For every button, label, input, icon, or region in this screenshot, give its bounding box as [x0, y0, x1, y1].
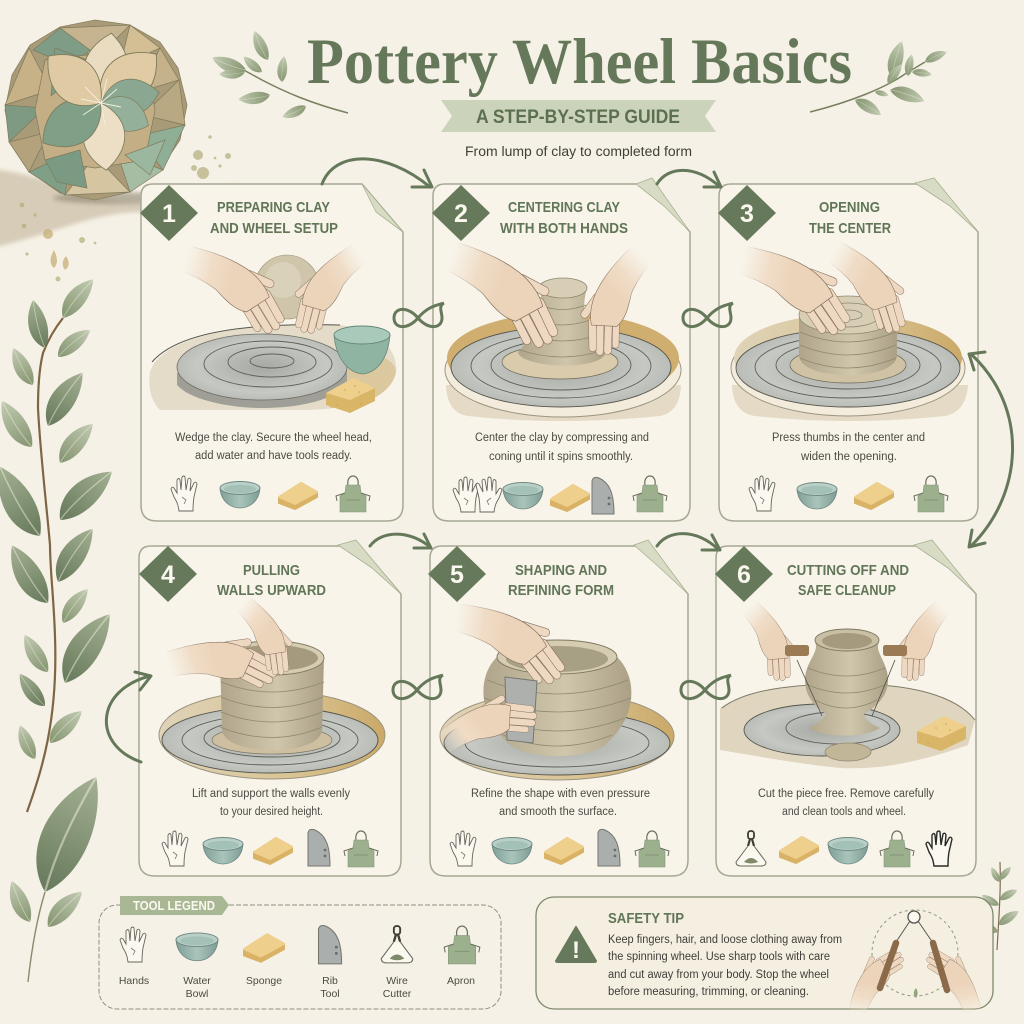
- description: [192, 788, 350, 818]
- link: between steps 1 and 2: [394, 303, 444, 327]
- panel: tool legend: [99, 896, 501, 1009]
- number badge 5: 5: [450, 561, 464, 589]
- number badge 2: [432, 185, 490, 241]
- legend item: rib tool: Tool: [320, 988, 340, 1000]
- arrow: step 3 to 6: [969, 352, 1013, 547]
- decorative sprig: main left branch: [0, 273, 120, 812]
- heading: THE CENTER: [809, 220, 891, 237]
- number badge 4: 4: [161, 561, 175, 589]
- legend item: hands: Hands: [119, 975, 149, 987]
- heading: OPENING: [819, 199, 880, 216]
- illustration: clay ball over wheel: [149, 244, 396, 413]
- heading: [210, 199, 338, 237]
- arrow: step 6 back to 4: [106, 672, 151, 762]
- safety text: and cut away from your body. Stop the wheel: [608, 969, 829, 981]
- description: to your desired height.: [220, 806, 323, 818]
- tool icons: [736, 831, 952, 867]
- heading: CENTERING CLAY: [508, 199, 620, 216]
- safety text: Keep fingers, hair, and loose clothing away from: [608, 934, 842, 946]
- illustration: vase and wire: [720, 600, 975, 768]
- description: [475, 432, 649, 463]
- legend item: wire cutter: [381, 926, 413, 1000]
- description: [471, 788, 650, 818]
- legend item: apron: Apron: [447, 975, 475, 987]
- legend item: apron: [444, 926, 480, 987]
- heading: WALLS UPWARD: [217, 582, 326, 599]
- tool icons: [450, 829, 669, 867]
- number badge 3: 3: [740, 200, 754, 228]
- safety text: before measuring, trimming, or cleaning.: [608, 986, 809, 998]
- number badge 1: 1: [162, 200, 176, 228]
- legend item: water bowl: Water: [183, 975, 211, 987]
- tool icons: [162, 829, 378, 867]
- tagline: From lump of clay to completed form: [465, 144, 692, 159]
- heading: [508, 562, 614, 599]
- legend item: sponge: Sponge: [246, 975, 282, 987]
- safety text: the spinning wheel. Use sharp tools with care: [608, 951, 830, 963]
- heading: [217, 562, 326, 599]
- description: widen the opening.: [800, 451, 897, 463]
- number badge 6: [715, 546, 773, 602]
- heading: [787, 562, 909, 599]
- legend label: [120, 896, 229, 915]
- icon: warning triangle: !: [572, 937, 580, 964]
- safety text: [608, 934, 842, 998]
- watercolor splatter dots: [20, 135, 231, 282]
- arrow: step 2 to 3: [657, 170, 721, 187]
- icon: warning triangle: [556, 927, 596, 964]
- heading: SAFE CLEANUP: [798, 582, 896, 599]
- heading: PULLING: [243, 562, 300, 579]
- panel: step 1 preparing clay: [140, 184, 403, 521]
- panel: step 5 shaping: [428, 540, 688, 876]
- heading: [500, 199, 628, 237]
- decorative sprig: lower right: [977, 862, 1021, 950]
- legend item: water bowl: Bowl: [186, 988, 208, 1000]
- illustration: opening the clay: [731, 241, 968, 421]
- number badge 1: [140, 185, 198, 241]
- number badge 2: 2: [454, 200, 468, 228]
- decorative sprig: lower left leaves: [3, 766, 114, 982]
- arrow: step 1 to 2: [322, 159, 432, 187]
- decorative origami flower ball: [0, 20, 240, 250]
- tool icons: [453, 476, 667, 514]
- panel: step 6 cutting off: [715, 540, 976, 876]
- illustration: pulling walls: [159, 596, 385, 779]
- panel: step 3 opening the center: [718, 178, 978, 521]
- illustration: shaping pot: [435, 604, 674, 780]
- heading: SHAPING AND: [515, 562, 607, 579]
- illustration: wire cutter in hands: [849, 910, 981, 1020]
- panel: safety tip: [536, 897, 993, 1020]
- safety heading: SAFETY TIP: [608, 910, 684, 927]
- legend item: wire cutter: Wire: [386, 975, 408, 987]
- description: Cut the piece free. Remove carefully: [758, 788, 934, 800]
- description: [758, 788, 934, 818]
- description: Refine the shape with even pressure: [471, 788, 650, 800]
- description: Wedge the clay. Secure the wheel head,: [175, 432, 372, 444]
- title: Pottery Wheel Basics: [307, 26, 852, 98]
- decorative sprig: title left: [209, 29, 348, 122]
- link: between steps 5 and 6: [681, 675, 731, 699]
- legend label: TOOL LEGEND: [133, 899, 215, 913]
- legend item: sponge: [244, 934, 284, 987]
- description: and smooth the surface.: [499, 806, 617, 818]
- number badge 6: 6: [737, 561, 751, 589]
- description: coning until it spins smoothly.: [489, 451, 633, 463]
- number badge 3: [718, 185, 776, 241]
- legend item: wire cutter: Cutter: [383, 988, 412, 1000]
- heading: WITH BOTH HANDS: [500, 220, 628, 237]
- legend item: rib tool: Rib: [322, 975, 338, 987]
- number badge 5: [428, 546, 486, 602]
- subtitle ribbon: [441, 100, 716, 132]
- heading: [809, 199, 891, 237]
- heading: PREPARING CLAY: [217, 199, 330, 216]
- heading: CUTTING OFF AND: [787, 562, 909, 579]
- subtitle ribbon: A STEP-BY-STEP GUIDE: [476, 106, 680, 128]
- arrow: step 4 to 5: [370, 534, 431, 548]
- heading: AND WHEEL SETUP: [210, 220, 338, 237]
- description: and clean tools and wheel.: [782, 806, 906, 818]
- arrow: step 5 to 6: [657, 534, 720, 550]
- description: Press thumbs in the center and: [772, 432, 925, 444]
- panel: step 2 centering clay: [432, 178, 690, 521]
- description: Center the clay by compressing and: [475, 432, 649, 444]
- link: between steps 4 and 5: [393, 675, 443, 699]
- illustration: centering on wheel: [433, 242, 681, 421]
- description: add water and have tools ready.: [195, 450, 352, 462]
- tool icons: [749, 476, 948, 512]
- link: between steps 2 and 3: [683, 303, 733, 327]
- legend item: hands: [119, 927, 149, 987]
- description: [175, 432, 372, 462]
- description: Lift and support the walls evenly: [192, 788, 350, 800]
- decorative sprig: title right: [810, 39, 948, 119]
- description: [772, 432, 925, 463]
- number badge 4: [139, 546, 197, 602]
- heading: REFINING FORM: [508, 582, 614, 599]
- legend item: water bowl: [176, 933, 218, 1000]
- legend item: rib tool: [318, 926, 342, 1000]
- panel: step 4 pulling walls: [139, 540, 401, 876]
- tool icons: [171, 476, 370, 512]
